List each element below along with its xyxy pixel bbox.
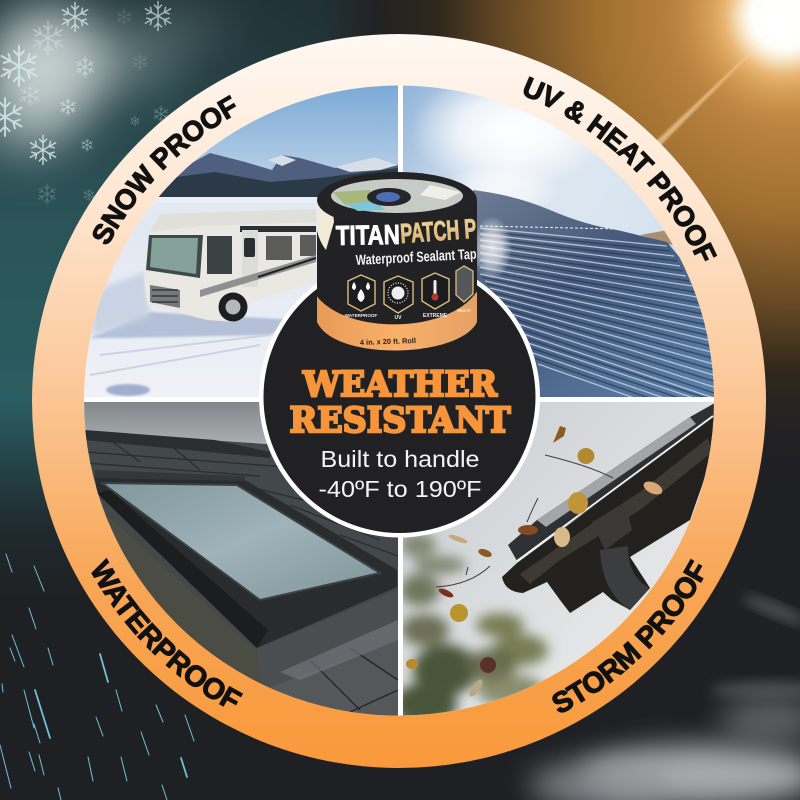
roll badge: UV: UV <box>395 315 402 321</box>
roll title: TITAN <box>336 219 400 251</box>
snow clouds <box>0 10 230 155</box>
photo: metal roof under sun <box>403 86 714 397</box>
roll body <box>317 200 477 351</box>
photo: rainy skylight <box>84 402 398 716</box>
center badge <box>259 256 540 538</box>
RV <box>144 209 316 322</box>
lower stained slates <box>104 513 274 690</box>
heading: weather resistant <box>290 364 510 441</box>
snowflakes <box>0 1 171 273</box>
roll title <box>336 213 477 251</box>
roll top <box>317 172 477 228</box>
skylight frame <box>95 477 397 648</box>
sun glare <box>655 0 800 146</box>
storm clouds <box>530 592 800 800</box>
curved label: WATERPROOF: WATERPROOF <box>91 558 243 707</box>
ground shadow <box>90 312 300 338</box>
roll badge: waterproof: WATERPROOF <box>345 313 377 318</box>
tree <box>393 533 548 727</box>
roll title: PATCH P <box>399 213 477 249</box>
curved label: STORM PROOF: STORM PROOF <box>552 558 704 713</box>
curved label: UV & HEAT PROOF: UV & HEAT PROOF <box>524 76 718 262</box>
gutter <box>502 403 730 613</box>
temperature range text <box>318 446 482 502</box>
roll size label: 4 in. x 20 ft. Roll <box>360 336 416 347</box>
heading: weather resistant: WEATHER <box>302 364 498 405</box>
heading: weather resistant: RESISTANT <box>290 400 510 441</box>
photo: storm gutter with leaves <box>403 402 714 716</box>
roll subtitle: Waterproof Sealant Tap <box>355 247 477 269</box>
product roll <box>316 172 478 360</box>
photo quadrants <box>84 86 714 716</box>
curved label: SNOW PROOF: SNOW PROOF <box>92 94 236 244</box>
roll badge: UV <box>384 276 413 321</box>
skylight glass <box>102 483 380 600</box>
photo: snowy RV <box>84 86 398 397</box>
rain streaks <box>0 554 194 800</box>
roll badge: multi: MULTI <box>457 308 471 313</box>
roll badge: waterproof <box>345 275 377 318</box>
leaves <box>406 426 664 698</box>
roll badge: multi <box>456 266 473 313</box>
roll badge: extreme <box>422 273 449 319</box>
inner white disc behind photos <box>84 86 714 716</box>
temperature range text: Built to handle <box>320 446 480 472</box>
temperature range text: -40ºF to 190ºF <box>318 476 482 502</box>
roll badge: extreme: EXTREME <box>423 313 448 319</box>
orange band <box>316 200 478 360</box>
